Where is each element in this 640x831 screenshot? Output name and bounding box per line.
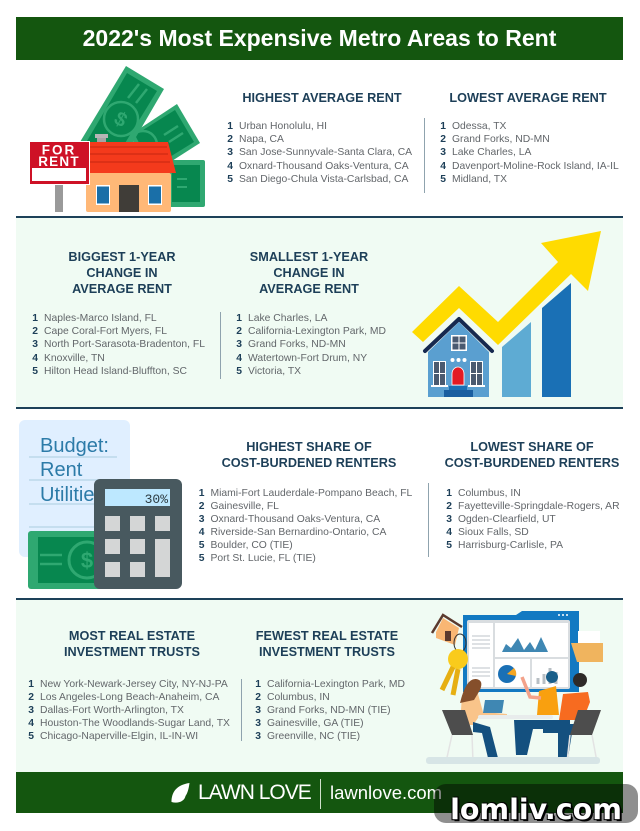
list: fewest REITs: 3 — [255, 718, 261, 729]
list: highest cost-burdened: 1 — [199, 488, 204, 498]
heading: biggest change: CHANGE IN — [86, 266, 158, 280]
heading: smallest change — [250, 250, 368, 296]
list: biggest change: Cape Coral-Fort Myers, FL — [44, 326, 167, 337]
icon: for rent sign: FOR — [42, 142, 76, 158]
heading: smallest change: CHANGE IN — [273, 266, 345, 280]
divider — [428, 483, 429, 557]
list: lowest average rent: Midland, TX — [452, 174, 507, 185]
heading: most REITs — [64, 629, 200, 659]
illustration: investment meeting — [426, 611, 603, 764]
list: fewest REITs: California-Lexington Park, MD — [267, 678, 405, 690]
list: highest average rent — [227, 121, 412, 185]
icon: budget sheet: Utilities — [40, 484, 104, 506]
icon: cash stack: $ — [110, 108, 131, 132]
list: most REITs: Dallas-Fort Worth-Arlington, TX — [40, 705, 184, 716]
list: highest cost-burdened: Oxnard-Thousand Oaks-Ventura, CA — [210, 514, 380, 525]
list: highest cost-burdened: Boulder, CO (TIE) — [210, 540, 293, 551]
list: highest cost-burdened: 2 — [199, 501, 204, 512]
list: highest cost-burdened: Gainesville, FL — [210, 501, 279, 512]
list: smallest change: 2 — [236, 326, 242, 337]
icon: banknote — [28, 531, 148, 589]
list: fewest REITs: Gainesville, GA (TIE) — [267, 718, 364, 729]
list: most REITs: Los Angeles-Long Beach-Anaheim, CA — [40, 692, 219, 703]
list: lowest average rent: Davenport-Moline-Rock Island, IA-IL — [452, 161, 619, 172]
list: highest cost-burdened: 3 — [199, 514, 204, 525]
panel: rent change — [16, 218, 623, 408]
list: most REITs: 2 — [28, 692, 34, 703]
divider — [241, 679, 242, 741]
heading: biggest change: AVERAGE RENT — [72, 282, 172, 296]
list: most REITs: Chicago-Naperville-Elgin, IL-IN-WI — [40, 731, 198, 742]
heading: fewest REITs: INVESTMENT TRUSTS — [259, 645, 395, 659]
list: smallest change: Lake Charles, LA — [248, 313, 327, 324]
list: smallest change: California-Lexington Park, MD — [248, 326, 386, 337]
list: most REITs: 3 — [28, 705, 34, 716]
section rule — [16, 407, 623, 409]
list: lowest average rent — [440, 121, 619, 185]
list: lowest average rent: 1 — [440, 121, 446, 132]
heading: highest cost-burdened — [222, 440, 396, 470]
list: biggest change: Hilton Head Island-Bluffton, SC — [44, 366, 187, 377]
list: lowest cost-burdened: 3 — [446, 514, 452, 525]
section rule — [16, 598, 623, 600]
panel: real estate trusts — [16, 600, 623, 772]
list: most REITs: 5 — [28, 731, 34, 742]
heading: lowest cost-burdened: COST-BURDENED RENTERS — [445, 456, 619, 470]
footer — [16, 772, 623, 813]
list: highest cost-burdened: Port St. Lucie, FL (TIE) — [210, 553, 316, 564]
list: most REITs: 4 — [28, 718, 34, 729]
icon: house — [84, 134, 176, 212]
list: highest average rent: Oxnard-Thousand Oaks-Ventura, CA — [239, 161, 409, 172]
icon: budget sheet: Rent — [40, 459, 83, 481]
list: fewest REITs: 2 — [255, 692, 261, 703]
title: 2022's Most Expensive Metro Areas to Rent — [83, 25, 556, 51]
list: fewest REITs: 1 — [255, 678, 261, 690]
icon: for rent sign: RENT — [38, 154, 80, 169]
list: highest average rent: San Diego-Chula Vista-Carlsbad, CA — [239, 174, 408, 185]
list: lowest cost-burdened — [446, 488, 620, 551]
list: highest average rent: 3 — [227, 147, 233, 158]
list: most REITs — [28, 678, 230, 742]
heading: lowest cost-burdened: LOWEST SHARE OF — [470, 440, 594, 454]
website: lawnlove.com — [330, 782, 442, 803]
list: fewest REITs — [255, 678, 405, 742]
heading: biggest change — [68, 250, 176, 296]
list: fewest REITs: Columbus, IN — [267, 692, 330, 703]
list: fewest REITs: 3 — [255, 731, 261, 742]
list: lowest cost-burdened: 4 — [446, 527, 452, 538]
list: highest cost-burdened — [198, 488, 412, 564]
list: lowest cost-burdened: Fayetteville-Springdale-Rogers, AR — [458, 501, 620, 512]
divider — [320, 779, 321, 809]
list: biggest change: 2 — [32, 326, 38, 337]
list: smallest change: 4 — [236, 353, 242, 364]
logo: leaf icon — [172, 783, 190, 803]
list: lowest average rent: Grand Forks, ND-MN — [452, 134, 550, 145]
heading: smallest change: AVERAGE RENT — [259, 282, 359, 296]
list: smallest change: Victoria, TX — [248, 366, 301, 377]
list: smallest change: Grand Forks, ND-MN — [248, 339, 346, 350]
heading: lowest average rent: LOWEST AVERAGE RENT — [449, 91, 607, 105]
list: highest average rent: 1 — [227, 121, 233, 132]
icon: two men — [514, 671, 601, 762]
list: lowest cost-burdened: Ogden-Clearfield, UT — [458, 514, 556, 525]
list: fewest REITs: 3 — [255, 705, 261, 716]
list: highest average rent: San Jose-Sunnyvale-Santa Clara, CA — [239, 147, 412, 158]
list: smallest change: 3 — [236, 339, 242, 350]
floor shadow — [426, 757, 600, 764]
heading: lowest cost-burdened — [445, 440, 619, 470]
heading: biggest change: BIGGEST 1-YEAR — [68, 250, 176, 264]
heading: highest cost-burdened: COST-BURDENED RENTERS — [222, 456, 396, 470]
icon: for rent sign — [29, 141, 90, 212]
icon: house and keys — [432, 615, 468, 695]
list: lowest average rent: 5 — [440, 174, 446, 185]
list: lowest cost-burdened: 2 — [446, 501, 452, 512]
heading: highest cost-burdened: HIGHEST SHARE OF — [246, 440, 372, 454]
heading: smallest change: SMALLEST 1-YEAR — [250, 250, 368, 264]
list: highest average rent: 4 — [227, 161, 233, 172]
list: lowest cost-burdened: 1 — [446, 488, 452, 498]
list: highest cost-burdened: 5 — [199, 540, 204, 551]
list: most REITs: New York-Newark-Jersey City, NY-NJ-PA — [40, 678, 228, 690]
list: highest cost-burdened: Riverside-San Bernardino-Ontario, CA — [210, 527, 386, 538]
list: lowest average rent: Lake Charles, LA — [452, 147, 531, 158]
illustration: budget and calculator — [19, 420, 182, 589]
list: highest cost-burdened: 4 — [199, 527, 204, 538]
icon: folder — [571, 631, 603, 662]
illustration: rising chart with house — [412, 231, 601, 397]
icon: cash stack — [80, 66, 205, 207]
list: biggest change: 3 — [32, 339, 38, 350]
icon: dashboard screen — [463, 611, 579, 692]
watermark — [434, 784, 638, 823]
section rule — [16, 216, 623, 218]
list: biggest change: 5 — [32, 366, 38, 377]
list: lowest cost-burdened: Columbus, IN — [458, 488, 521, 498]
list: lowest cost-burdened: 5 — [446, 540, 452, 551]
list: highest average rent: Napa, CA — [239, 134, 284, 145]
list: highest cost-burdened: 5 — [199, 553, 204, 564]
list: lowest average rent: 2 — [440, 134, 446, 145]
heading: most REITs: MOST REAL ESTATE — [69, 629, 195, 643]
list: biggest change: North Port-Sarasota-Bradenton, FL — [44, 339, 205, 350]
list: biggest change: Naples-Marco Island, FL — [44, 313, 157, 324]
title — [16, 17, 623, 60]
icon: calculator: 30% — [145, 492, 168, 507]
logo: Lawn Love wordmark: LAWN LOVE — [198, 781, 311, 804]
list: lowest average rent: 3 — [440, 147, 446, 158]
list: biggest change: 4 — [32, 353, 38, 364]
watermark: lomliv.com — [450, 793, 622, 826]
list: lowest average rent: Odessa, TX — [452, 121, 506, 132]
icon: calculator — [94, 479, 182, 589]
icon: table and laptop — [478, 700, 553, 719]
list: highest cost-burdened: Miami-Fort Lauderdale-Pompano Beach, FL — [210, 488, 412, 498]
icon: yellow arrow — [412, 231, 601, 345]
list: most REITs: 1 — [28, 678, 34, 690]
heading: most REITs: INVESTMENT TRUSTS — [64, 645, 200, 659]
list: most REITs: Houston-The Woodlands-Sugar Land, TX — [40, 718, 230, 729]
divider — [220, 312, 221, 379]
heading: fewest REITs — [256, 629, 398, 659]
heading: highest average rent: HIGHEST AVERAGE RENT — [242, 91, 402, 105]
list: biggest change — [32, 313, 205, 377]
icon: blue house — [425, 319, 492, 397]
list: biggest change: 1 — [32, 313, 38, 324]
list: highest average rent: 2 — [227, 134, 233, 145]
icon: bars — [502, 283, 571, 397]
list: smallest change: 1 — [236, 313, 242, 324]
list: biggest change: Knoxville, TN — [44, 353, 105, 364]
icon: banknote: $ — [81, 548, 93, 573]
list: smallest change — [236, 313, 386, 377]
list: fewest REITs: Grand Forks, ND-MN (TIE) — [267, 705, 391, 716]
list: smallest change: 5 — [236, 366, 242, 377]
icon: budget sheet: Budget: — [40, 435, 109, 457]
icon: budget sheet — [19, 420, 130, 557]
list: fewest REITs: Greenville, NC (TIE) — [267, 731, 360, 742]
heading: fewest REITs: FEWEST REAL ESTATE — [256, 629, 398, 643]
list: lowest cost-burdened: Harrisburg-Carlisle, PA — [458, 540, 563, 551]
divider — [424, 118, 425, 193]
list: lowest average rent: 4 — [440, 161, 446, 172]
list: lowest cost-burdened: Sioux Falls, SD — [458, 527, 529, 538]
list: smallest change: Watertown-Fort Drum, NY — [248, 353, 367, 364]
list: highest average rent: 5 — [227, 174, 233, 185]
icon: woman seated — [442, 679, 507, 762]
list: highest average rent: Urban Honolulu, HI — [239, 121, 327, 132]
